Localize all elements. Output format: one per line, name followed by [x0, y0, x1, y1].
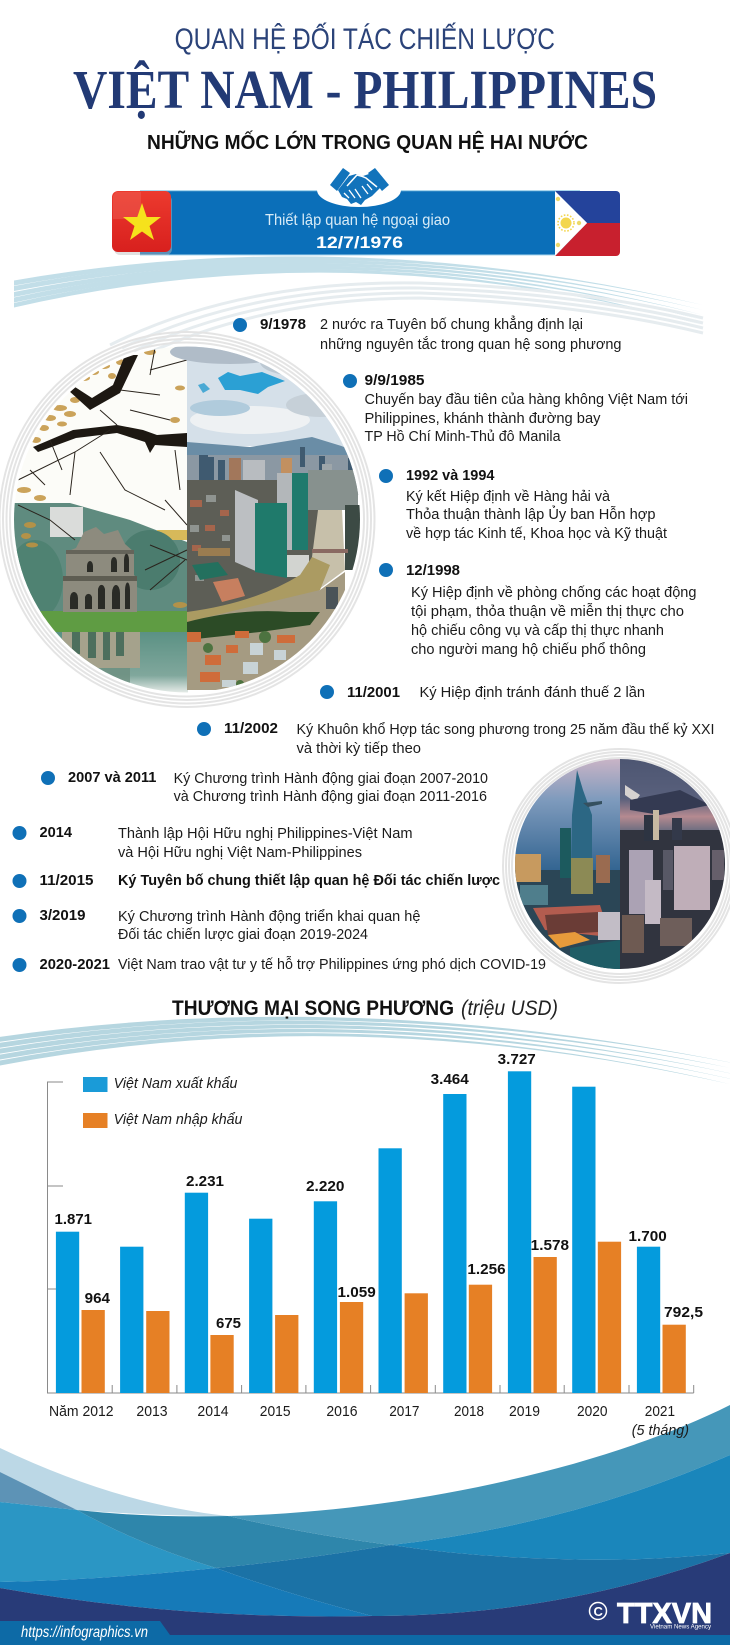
logo: TTXVN: C [594, 1604, 604, 1619]
x axis labels: 2017 [389, 1403, 420, 1420]
x axis labels: 2013 [136, 1403, 168, 1420]
title line 1: QUAN HỆ ĐỐI TÁC CHIẾN LƯỢC [175, 22, 555, 56]
icon: Vietnam flag [112, 191, 172, 255]
x axis labels: 2020 [577, 1403, 608, 1420]
value labels: 1.059 [338, 1284, 376, 1301]
footer waves [0, 1405, 730, 1645]
icon: handshake [330, 168, 389, 205]
chart axes [48, 1082, 694, 1393]
banner: established relations [140, 173, 580, 256]
x axis labels: 2016 [326, 1403, 358, 1420]
decorative wave: top [14, 256, 703, 354]
logo: TTXVN: Vietnam News Agency [650, 1624, 711, 1630]
timeline item: 11/2001 [320, 684, 645, 701]
footer url: https://infographics.vn [21, 1624, 148, 1641]
x axis labels: 2015 [260, 1403, 290, 1420]
banner: established relations: 12/7/1976 [316, 233, 403, 252]
banner: established relations: Thiết lập quan hệ ngoại giao [265, 212, 450, 229]
decorative wave: chart [0, 1017, 730, 1086]
timeline item: 12/1998: Ký Hiệp định về phòng chống các hoạt động [411, 584, 696, 601]
icon: Philippines flag [555, 191, 620, 256]
timeline item: 2014: 2014 [40, 824, 73, 841]
timeline item: 11/2002: và thời kỳ tiếp theo [296, 740, 421, 757]
timeline item: 2014: và Hội Hữu nghị Việt Nam-Philippines [118, 844, 362, 861]
timeline item: 12/1998: 12/1998 [406, 562, 460, 579]
logo: TTXVN: TTXVN [617, 1598, 712, 1630]
timeline item: 12/1998: cho người mang hộ chiếu phổ thông [411, 641, 646, 658]
timeline item: 2007 và 2011: 2007 và 2011 [68, 769, 156, 786]
value labels: 2.220 [306, 1178, 344, 1195]
timeline item: 1992 và 1994 [379, 467, 668, 542]
value labels: 1.256 [467, 1261, 506, 1278]
timeline item: 11/2001: Ký Hiệp định tránh đánh thuế 2 lần [420, 684, 645, 701]
value labels: 792,5 [664, 1304, 703, 1321]
x axis labels: 2014 [197, 1403, 229, 1420]
timeline item: 1992 và 1994: Thỏa thuận thành lập Ủy ban Hỗn hợp [406, 505, 656, 523]
photo: Manila skyline [170, 340, 362, 690]
chart heading: THƯƠNG MẠI SONG PHƯƠNG [172, 997, 454, 1020]
main title: VIỆT NAM - PHILIPPINES [73, 59, 657, 120]
x axis labels: Năm 2012 [49, 1403, 114, 1420]
timeline item: 11/2001: 11/2001 [347, 684, 400, 701]
timeline item: 9/1978: những nguyên tắc trong quan hệ song phương [320, 336, 622, 353]
timeline item: 1992 và 1994: về hợp tác Kinh tế, Khoa học và Kỹ thuật [406, 525, 668, 542]
timeline item: 9/9/1985: TP Hồ Chí Minh-Thủ đô Manila [364, 428, 561, 445]
timeline item: 11/2002: 11/2002 [224, 720, 278, 737]
legend: Việt Nam xuất khẩu [114, 1075, 238, 1092]
value labels: 2.231 [186, 1173, 224, 1190]
bar chart: bilateral trade [48, 1051, 703, 1439]
timeline item: 2014 [12, 824, 412, 861]
timeline item: 2020-2021: 2020-2021 [40, 956, 110, 973]
timeline item: 2007 và 2011: và Chương trình Hành động giai đoạn 2011-2016 [174, 788, 487, 805]
legend: Việt Nam nhập khẩu [114, 1111, 243, 1128]
subtitle: NHỮNG MỐC LỚN TRONG QUAN HỆ HAI NƯỚC [147, 130, 588, 154]
timeline item: 9/9/1985: 9/9/1985 [364, 372, 424, 389]
value labels [54, 1051, 703, 1332]
timeline item: 9/9/1985: Philippines, khánh thành đường bay [364, 410, 601, 427]
timeline item: 11/2015: 11/2015 [40, 872, 94, 889]
timeline item: 3/2019 [12, 907, 420, 943]
photo: Ho Chi Minh City [515, 759, 726, 970]
value labels: 1.578 [531, 1237, 569, 1254]
timeline item: 3/2019: Đối tác chiến lược giai đoạn 2019-2024 [118, 926, 368, 943]
timeline item: 9/9/1985: Chuyến bay đầu tiên của hàng không Việt Nam tới [364, 391, 688, 408]
decorative rings: small photo [503, 749, 730, 983]
decorative rings: large photo [0, 332, 374, 707]
x axis labels [49, 1403, 689, 1439]
timeline item: 3/2019: Ký Chương trình Hành động triển khai quan hệ [118, 908, 420, 925]
timeline item: 2014: Thành lập Hội Hữu nghị Philippines-Việt Nam [118, 825, 412, 842]
timeline item: 3/2019: 3/2019 [40, 907, 86, 924]
timeline item: 11/2002: Ký Khuôn khổ Hợp tác song phương trong 25 năm đầu thế kỷ XXI [296, 721, 714, 738]
x axis labels: 2019 [509, 1403, 540, 1420]
timeline item: 1992 và 1994: Ký kết Hiệp định về Hàng hải và [406, 488, 611, 505]
timeline item: 11/2002 [197, 720, 714, 757]
value labels: 3.727 [498, 1051, 536, 1068]
value labels: 964 [85, 1290, 111, 1307]
export bars [56, 1071, 660, 1393]
x axis labels: (5 tháng) [632, 1422, 689, 1439]
import bars [82, 1242, 686, 1393]
chart heading: (triệu USD) [461, 997, 558, 1020]
timeline item: 2007 và 2011: Ký Chương trình Hành động giai đoạn 2007-2010 [174, 770, 488, 787]
value labels: 675 [216, 1315, 241, 1332]
value labels: 3.464 [431, 1071, 469, 1088]
timeline item: 12/1998: hộ chiếu công vụ và cấp thị thực nhanh [411, 622, 664, 639]
value labels: 1.871 [54, 1211, 92, 1228]
timeline item: 9/1978 [233, 315, 622, 353]
timeline item: 2020-2021: Việt Nam trao vật tư y tế hỗ trợ Philippines ứng phó dịch COVID-19 [118, 956, 546, 973]
value labels: 1.700 [628, 1228, 667, 1245]
timeline item: 12/1998 [379, 562, 696, 658]
timeline item: 2007 và 2011 [41, 769, 488, 805]
timeline item: 11/2015: Ký Tuyên bố chung thiết lập quan hệ Đối tác chiến lược [118, 872, 500, 889]
timeline item: 9/1978: 9/1978 [260, 316, 306, 333]
legend [83, 1075, 243, 1128]
timeline item: 9/1978: 2 nước ra Tuyên bố chung khẳng định lại [320, 315, 583, 333]
timeline item: 9/9/1985 [343, 372, 688, 445]
x axis labels: 2018 [454, 1403, 484, 1420]
x axis labels: 2021 [645, 1403, 675, 1420]
timeline item: 12/1998: tội phạm, thỏa thuận về miễn thị thực cho [411, 603, 684, 620]
photo: Hanoi Turtle Tower [7, 346, 188, 694]
timeline item: 1992 và 1994: 1992 và 1994 [406, 467, 495, 484]
